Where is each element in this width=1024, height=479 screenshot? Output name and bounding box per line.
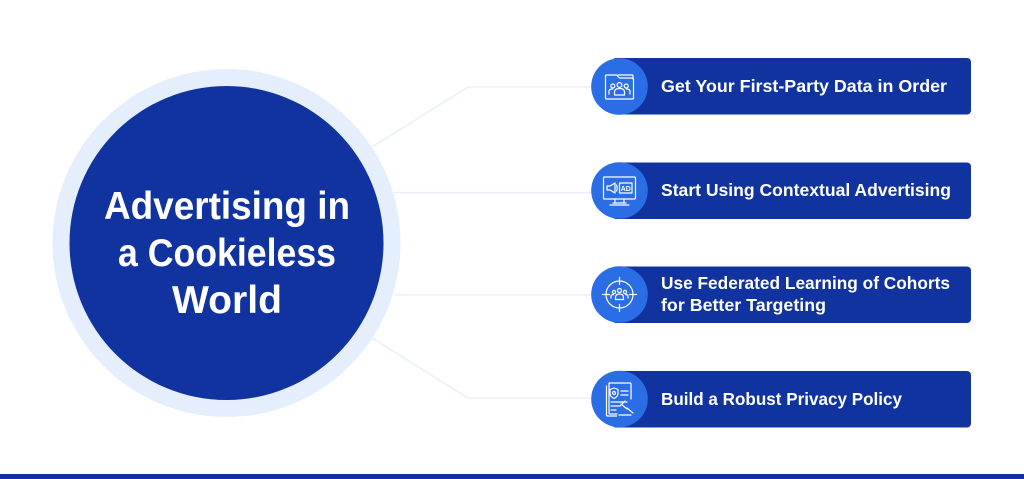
item 1: first-party data [591, 58, 971, 115]
label: Build a Robust Privacy Policy [661, 389, 902, 409]
label: for Better Targeting [661, 295, 826, 315]
icon text: AD: AD [621, 184, 631, 193]
item 2: contextual advertising [591, 162, 971, 219]
title: World [172, 279, 282, 322]
icon: policy document [606, 383, 633, 416]
icon: target audience [602, 278, 636, 312]
icon: monitor with ad [604, 177, 636, 205]
icon: data folder [606, 75, 634, 99]
label: Use Federated Learning of Cohorts [661, 273, 950, 293]
title [104, 185, 350, 322]
label: Start Using Contextual Advertising [661, 180, 951, 200]
item 3: federated learning [591, 266, 971, 323]
title: Advertising in [104, 185, 350, 228]
label: Get Your First-Party Data in Order [661, 76, 947, 96]
bottom bar [0, 474, 1024, 479]
title: a Cookieless [118, 232, 336, 275]
item 4: privacy policy [591, 371, 971, 428]
central circle [52, 69, 400, 417]
label [661, 273, 950, 315]
